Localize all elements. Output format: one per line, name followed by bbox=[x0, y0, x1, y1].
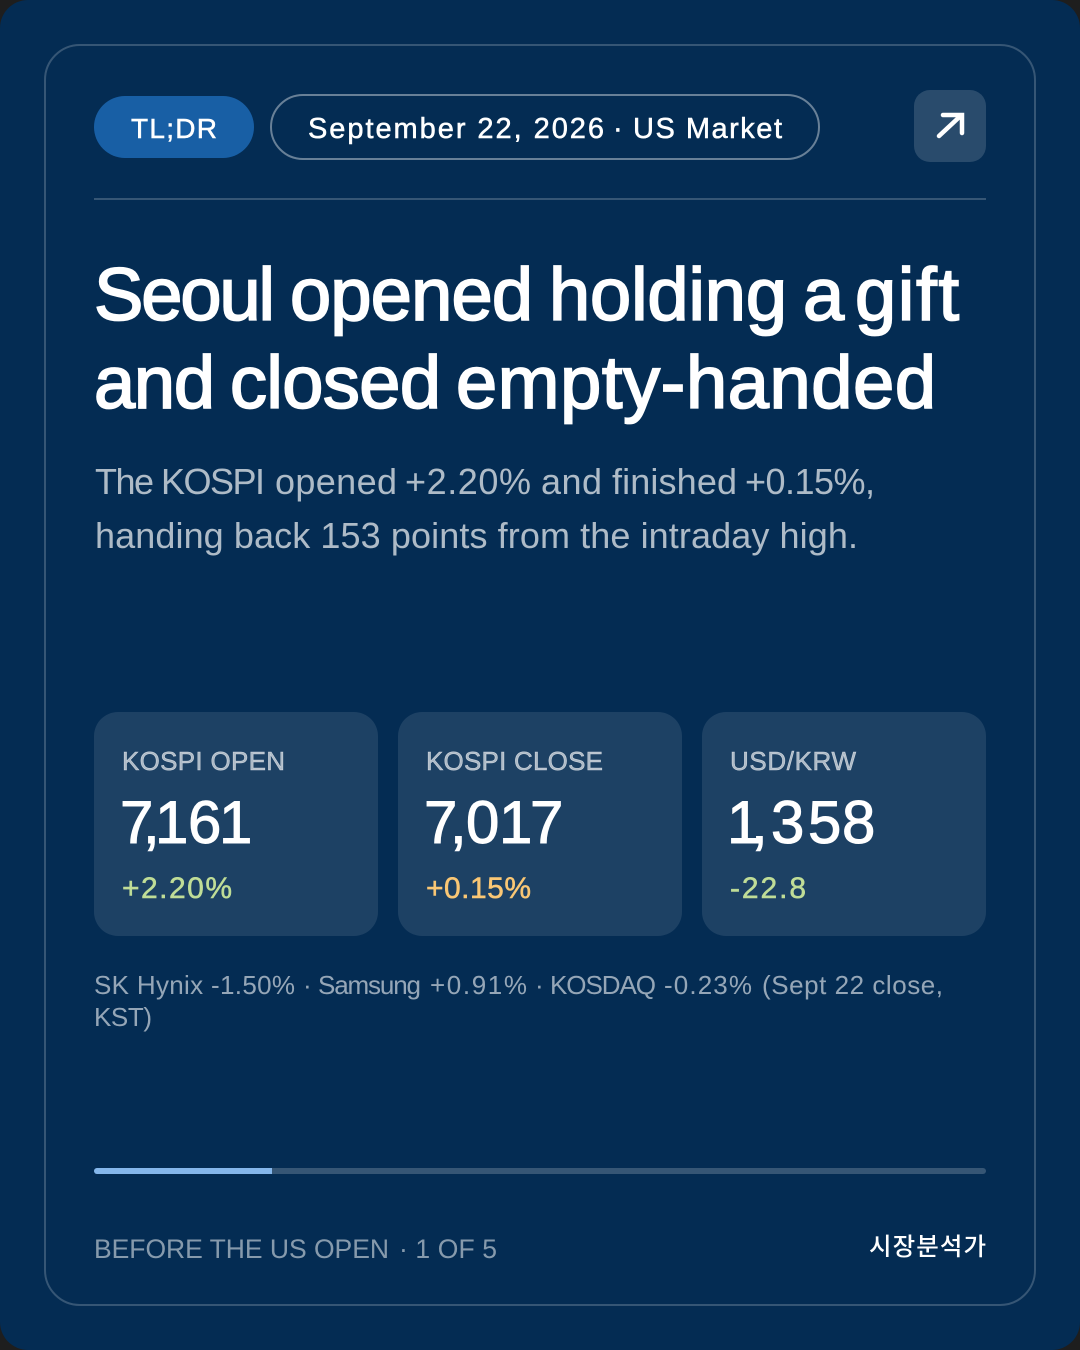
stat card: USD/KRW bbox=[702, 712, 986, 936]
subtitle: opened bbox=[275, 461, 397, 502]
title: closed bbox=[230, 341, 441, 424]
stat card: KOSPI open: +2.20% bbox=[122, 872, 232, 905]
market footnote: SK Hynix -1.50% bbox=[94, 970, 295, 1000]
market footnote: Samsung bbox=[318, 970, 421, 1000]
stat card: USD/KRW: USD/KRW bbox=[730, 746, 856, 776]
title: and bbox=[94, 341, 215, 424]
title: a bbox=[803, 253, 845, 336]
stat card: KOSPI close: KOSPI CLOSE bbox=[426, 746, 603, 776]
title: Seoul bbox=[94, 253, 275, 336]
title: opened bbox=[290, 253, 533, 336]
market footnote bbox=[94, 970, 943, 1032]
date pill: US Market bbox=[633, 113, 782, 145]
subtitle bbox=[95, 461, 875, 556]
stat card: KOSPI open: KOSPI OPEN bbox=[122, 746, 285, 776]
progress bar bbox=[94, 1168, 986, 1174]
footer label: · 1 OF 5 bbox=[399, 1234, 497, 1264]
market footnote: KOSDAQ bbox=[550, 970, 656, 1000]
stat card: KOSPI open: 7,161 bbox=[120, 789, 252, 856]
market footnote: -0.23% bbox=[664, 970, 752, 1000]
stat card: KOSPI close bbox=[398, 712, 682, 936]
stat card: KOSPI open bbox=[94, 712, 378, 936]
badge: TL;DR bbox=[94, 96, 254, 158]
icon: arrow button bbox=[914, 90, 986, 162]
subtitle: handing back 153 points from the intraday high. bbox=[95, 515, 858, 556]
title: holding bbox=[549, 253, 787, 336]
subtitle: and bbox=[541, 461, 602, 502]
date pill: · bbox=[613, 113, 623, 145]
header divider bbox=[94, 198, 986, 200]
title: gift bbox=[855, 253, 959, 336]
subtitle: The KOSPI bbox=[95, 461, 265, 502]
market footnote: · bbox=[303, 970, 312, 1000]
subtitle: +0.15%, bbox=[745, 461, 875, 502]
stat card: USD/KRW: -22.8 bbox=[730, 872, 806, 905]
stat card: KOSPI close: 7,017 bbox=[424, 789, 563, 856]
subtitle: finished bbox=[612, 461, 737, 502]
subtitle: +2.20% bbox=[405, 461, 531, 502]
date pill bbox=[271, 95, 819, 159]
title bbox=[94, 253, 959, 424]
footer brand: 시장분석가 bbox=[869, 1233, 986, 1261]
market footnote: KST) bbox=[94, 1002, 152, 1032]
title: empty-handed bbox=[456, 341, 936, 424]
market footnote: +0.91% bbox=[430, 970, 527, 1000]
stat card: USD/KRW: 1,358 bbox=[727, 789, 875, 856]
date pill: September 22, 2026 bbox=[308, 113, 604, 145]
badge: TL;DR: TL;DR bbox=[131, 113, 217, 144]
footer label: BEFORE THE US OPEN bbox=[94, 1234, 389, 1264]
stat card: KOSPI close: +0.15% bbox=[426, 872, 531, 905]
market footnote: (Sept 22 close, bbox=[762, 970, 943, 1000]
market footnote: · bbox=[535, 970, 544, 1000]
